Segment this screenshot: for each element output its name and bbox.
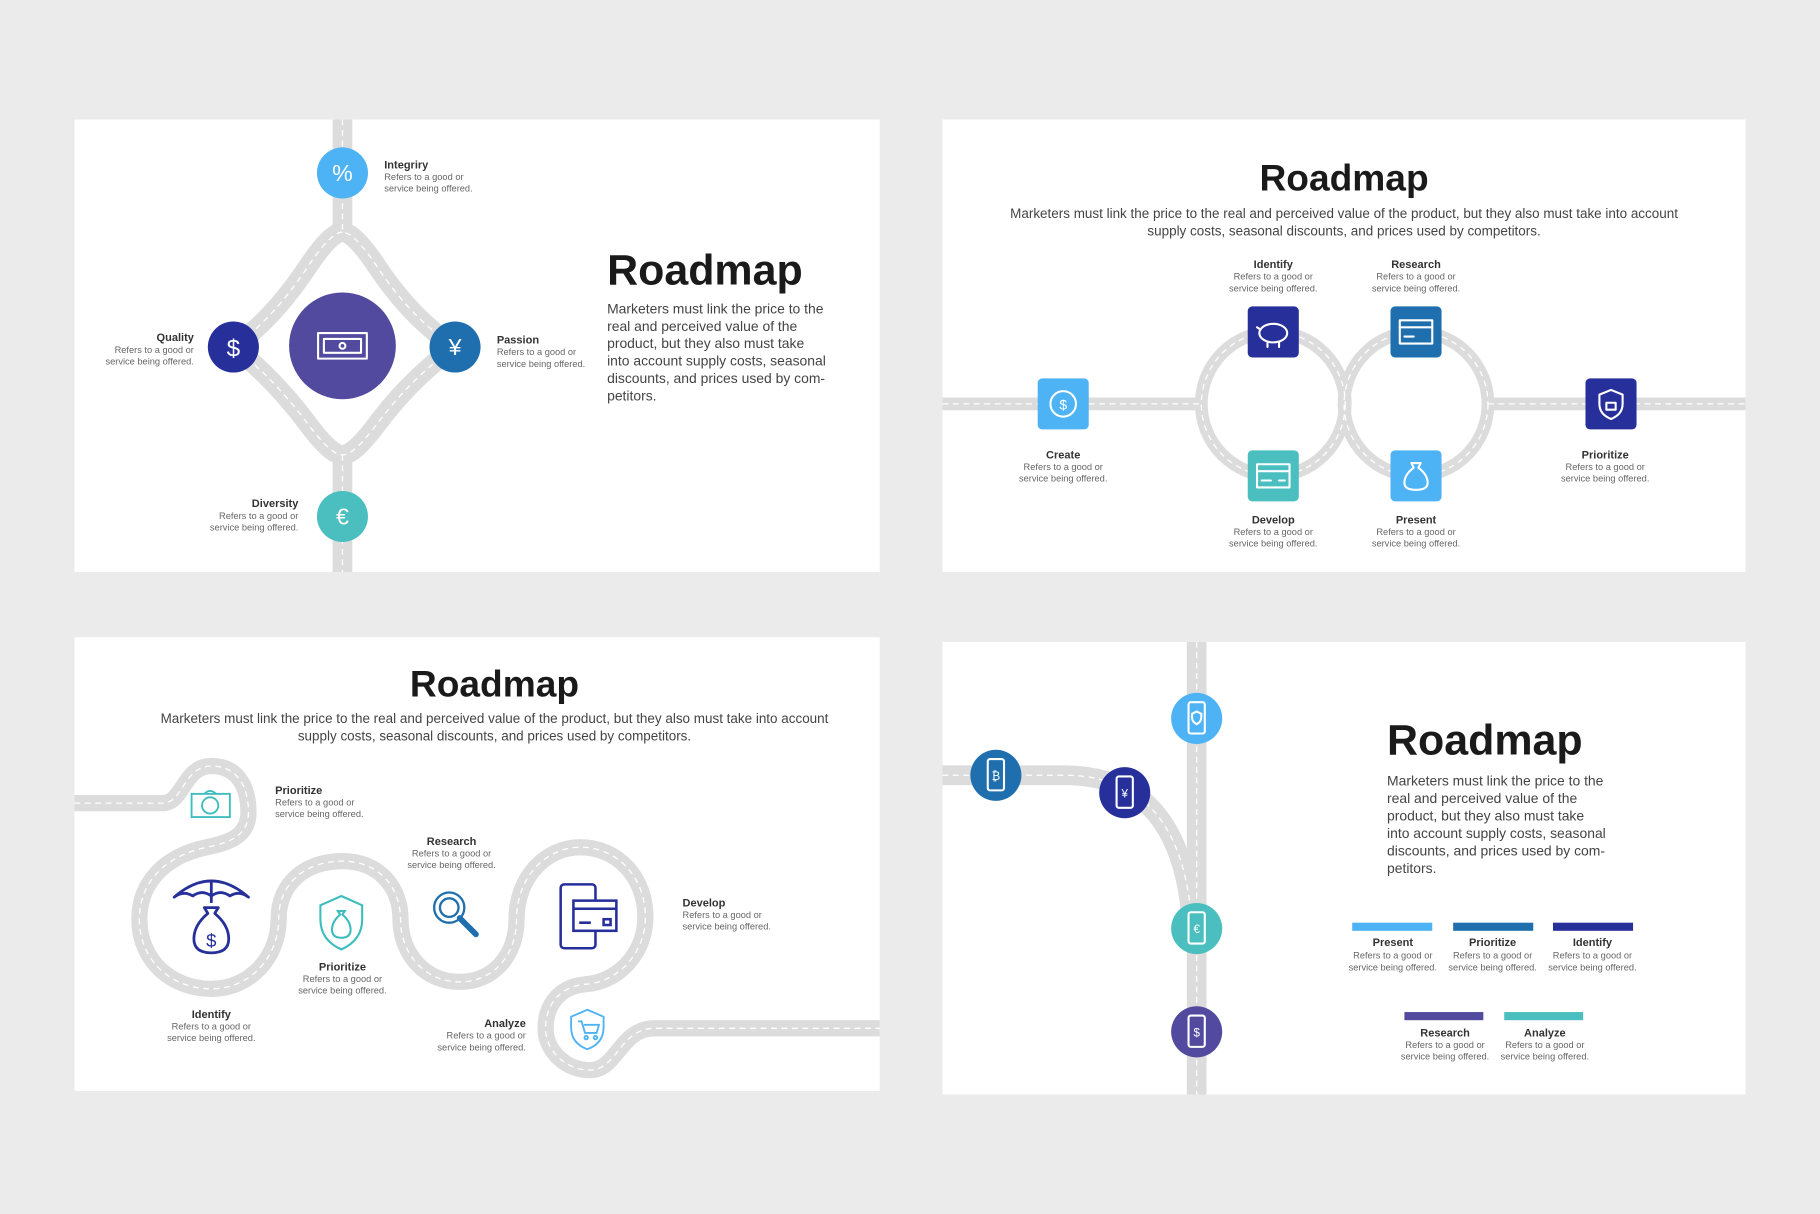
road: junction [942, 642, 1197, 1094]
label: Identify: Refers to a good or [172, 1021, 251, 1031]
label: Research: service being offered. [407, 860, 496, 870]
legend: Identify: Identify [1573, 937, 1613, 949]
legend: Research: Refers to a good or [1405, 1040, 1485, 1050]
label: Diversity: Diversity [252, 498, 299, 510]
label: Create [1019, 449, 1107, 484]
text block: discounts, and prices used by com- [607, 370, 825, 386]
road: winding [74, 766, 880, 1070]
label: Prioritize top: Refers to a good or [275, 797, 354, 807]
label: Diversity [210, 498, 299, 532]
icon: euro [317, 491, 368, 542]
label: Integriry: Integriry [384, 159, 429, 171]
label: Passion [497, 335, 585, 369]
label: Research [1372, 259, 1460, 293]
legend: Identify: service being offered. [1548, 962, 1637, 972]
label: Quality [105, 332, 195, 366]
label: Identify [167, 1009, 256, 1043]
label: Identify [1229, 259, 1317, 293]
text block: into account supply costs, seasonal [1387, 825, 1606, 841]
text block: into account supply costs, seasonal [607, 353, 826, 369]
label: Research: Research [427, 836, 477, 848]
text block: real and perceived value of the [607, 318, 798, 334]
label: Research: Refers to a good or [1376, 272, 1456, 282]
text block: discounts, and prices used by com- [1387, 842, 1605, 858]
label: Passion: Passion [497, 335, 539, 347]
label: Identify: Identify [1254, 259, 1294, 271]
legend: Research [1401, 1012, 1489, 1062]
label: Prioritize top: service being offered. [275, 809, 364, 819]
text block: Marketers must link the price to the [1387, 773, 1604, 789]
label: Present: Present [1396, 514, 1437, 526]
label: Research: service being offered. [1372, 283, 1460, 293]
icon: dollar [208, 321, 259, 373]
icon: phone euro: € [1193, 923, 1200, 936]
icon: phone bitcoin: ₿ [992, 770, 1000, 783]
label: Quality: Quality [157, 332, 195, 344]
legend: Prioritize: service being offered. [1448, 962, 1537, 972]
icon: cash [192, 791, 230, 817]
icon: prioritize shield [1585, 378, 1637, 429]
text block: Marketers must link the price to the [607, 300, 824, 316]
label: Prioritize top [275, 785, 364, 819]
label: Prioritize middle: service being offered. [298, 985, 387, 995]
label: Diversity: Refers to a good or [219, 511, 298, 521]
icon: create coin: $ [1059, 397, 1067, 413]
icon: phone shield [1171, 693, 1222, 744]
legend: Analyze: Refers to a good or [1505, 1040, 1585, 1050]
icon: shield money [320, 896, 362, 949]
label: Passion: service being offered. [497, 359, 585, 369]
label: Passion: Refers to a good or [497, 347, 576, 357]
legend: Research: Research [1420, 1027, 1470, 1039]
label: Research: Refers to a good or [412, 849, 491, 859]
text block: Marketers must link the price to the real and perceived value of the product, but they also must take into account [161, 711, 829, 726]
title: Roadmap [1387, 716, 1583, 764]
label: Diversity: service being offered. [210, 522, 298, 532]
label: Develop [683, 897, 771, 932]
label: Analyze: service being offered. [437, 1042, 526, 1052]
title: Roadmap [607, 246, 803, 294]
icon: shield cart [571, 1010, 604, 1049]
text block [1010, 206, 1678, 239]
label: Develop: service being offered. [683, 922, 771, 932]
label: Quality: service being offered. [105, 356, 194, 366]
icon: yen: ¥ [448, 334, 462, 360]
panel: diamond roadmap [74, 120, 880, 572]
title: Roadmap [1259, 156, 1429, 198]
label: Prioritize: Refers to a good or [1566, 462, 1645, 472]
icon: phone euro [1171, 903, 1222, 954]
label: Present: service being offered. [1372, 539, 1460, 549]
label: Present [1372, 514, 1460, 549]
icon: create coin [1038, 378, 1089, 429]
icon: phone dollar: $ [1193, 1026, 1200, 1039]
text block: real and perceived value of the [1387, 790, 1577, 806]
label: Integriry: Refers to a good or [384, 172, 464, 182]
label: Analyze: Analyze [484, 1018, 526, 1030]
label: Prioritize: service being offered. [1561, 474, 1649, 484]
panel: twin loop roadmap [942, 120, 1746, 572]
icon: euro: € [336, 504, 349, 530]
label: Analyze: Refers to a good or [447, 1031, 526, 1041]
label: Create: Refers to a good or [1024, 462, 1103, 472]
text block: petitors. [607, 387, 657, 403]
label: Create: Create [1046, 449, 1080, 461]
text block [607, 300, 826, 403]
legend: Present: Refers to a good or [1353, 951, 1432, 961]
road: diamond [245, 120, 442, 572]
icon: research card [1390, 306, 1442, 357]
label: Identify: service being offered. [1229, 283, 1317, 293]
legend: Identify: Refers to a good or [1553, 951, 1632, 961]
label: Develop: Develop [1252, 514, 1295, 526]
text block [161, 711, 829, 743]
label: Research: Research [1391, 259, 1441, 271]
label: Prioritize top: Prioritize [275, 785, 322, 797]
label: Research [407, 836, 496, 870]
icon: umbrella money bag [174, 881, 248, 953]
text block: Marketers must link the price to the real and perceived value of the product, but they also must take into account [1010, 206, 1678, 221]
label: Quality: Refers to a good or [115, 345, 194, 355]
label: Prioritize [1561, 449, 1649, 484]
label: Prioritize middle: Prioritize [319, 961, 366, 973]
label: Identify: Identify [192, 1009, 232, 1021]
label: Present: Refers to a good or [1376, 527, 1456, 537]
icon: center banknote [289, 292, 396, 399]
label: Develop: Refers to a good or [683, 910, 762, 920]
legend: Present [1349, 923, 1437, 972]
icon: identify piggy [1248, 306, 1299, 357]
icon: phone dollar [1171, 1006, 1222, 1057]
label: Develop [1229, 514, 1317, 549]
text block: petitors. [1387, 860, 1436, 876]
label: Integriry: service being offered. [384, 184, 473, 194]
panel: junction roadmap [942, 642, 1746, 1094]
icon: develop card [1248, 450, 1299, 501]
legend: Present: service being offered. [1349, 962, 1437, 972]
icon: umbrella money bag: $ [206, 930, 217, 951]
label: Analyze [437, 1018, 526, 1052]
icon: yen [430, 321, 481, 373]
panel: winding roadmap [74, 637, 880, 1091]
text block [1387, 773, 1606, 876]
legend: Prioritize: Refers to a good or [1453, 951, 1532, 961]
icon: phone yen: ¥ [1120, 787, 1128, 800]
icon: dollar: $ [227, 335, 241, 362]
legend: Identify [1548, 923, 1637, 972]
label: Develop: service being offered. [1229, 539, 1317, 549]
label: Integriry [384, 159, 473, 194]
legend: Present: Present [1373, 937, 1413, 949]
label: Prioritize middle: Refers to a good or [303, 974, 382, 984]
legend: Analyze [1501, 1012, 1589, 1062]
icon: phone card [561, 884, 616, 948]
legend: Prioritize [1448, 923, 1537, 972]
legend: Analyze: service being offered. [1501, 1052, 1589, 1062]
icon: phone bitcoin [970, 750, 1021, 801]
icon: phone yen [1099, 767, 1150, 818]
text block: supply costs, seasonal discounts, and prices used by competitors. [298, 728, 691, 743]
label: Identify: service being offered. [167, 1033, 256, 1043]
label: Prioritize middle [298, 961, 387, 995]
legend: Prioritize: Prioritize [1469, 937, 1516, 949]
label: Develop: Develop [683, 897, 726, 909]
icon: magnifier coin [434, 893, 476, 934]
legend: Analyze: Analyze [1524, 1027, 1566, 1039]
text block: supply costs, seasonal discounts, and prices used by competitors. [1147, 224, 1541, 239]
label: Prioritize: Prioritize [1582, 449, 1629, 461]
icon: percent: % [332, 160, 353, 186]
text block: product, but they also must take [1387, 808, 1584, 824]
title: Roadmap [410, 662, 579, 704]
legend: Research: service being offered. [1401, 1052, 1489, 1062]
label: Develop: Refers to a good or [1234, 527, 1313, 537]
label: Identify: Refers to a good or [1234, 272, 1313, 282]
icon: present bag [1390, 450, 1442, 501]
road: loops [942, 332, 1746, 476]
icon: percent [317, 147, 368, 198]
label: Create: service being offered. [1019, 474, 1107, 484]
text block: product, but they also must take [607, 335, 804, 351]
